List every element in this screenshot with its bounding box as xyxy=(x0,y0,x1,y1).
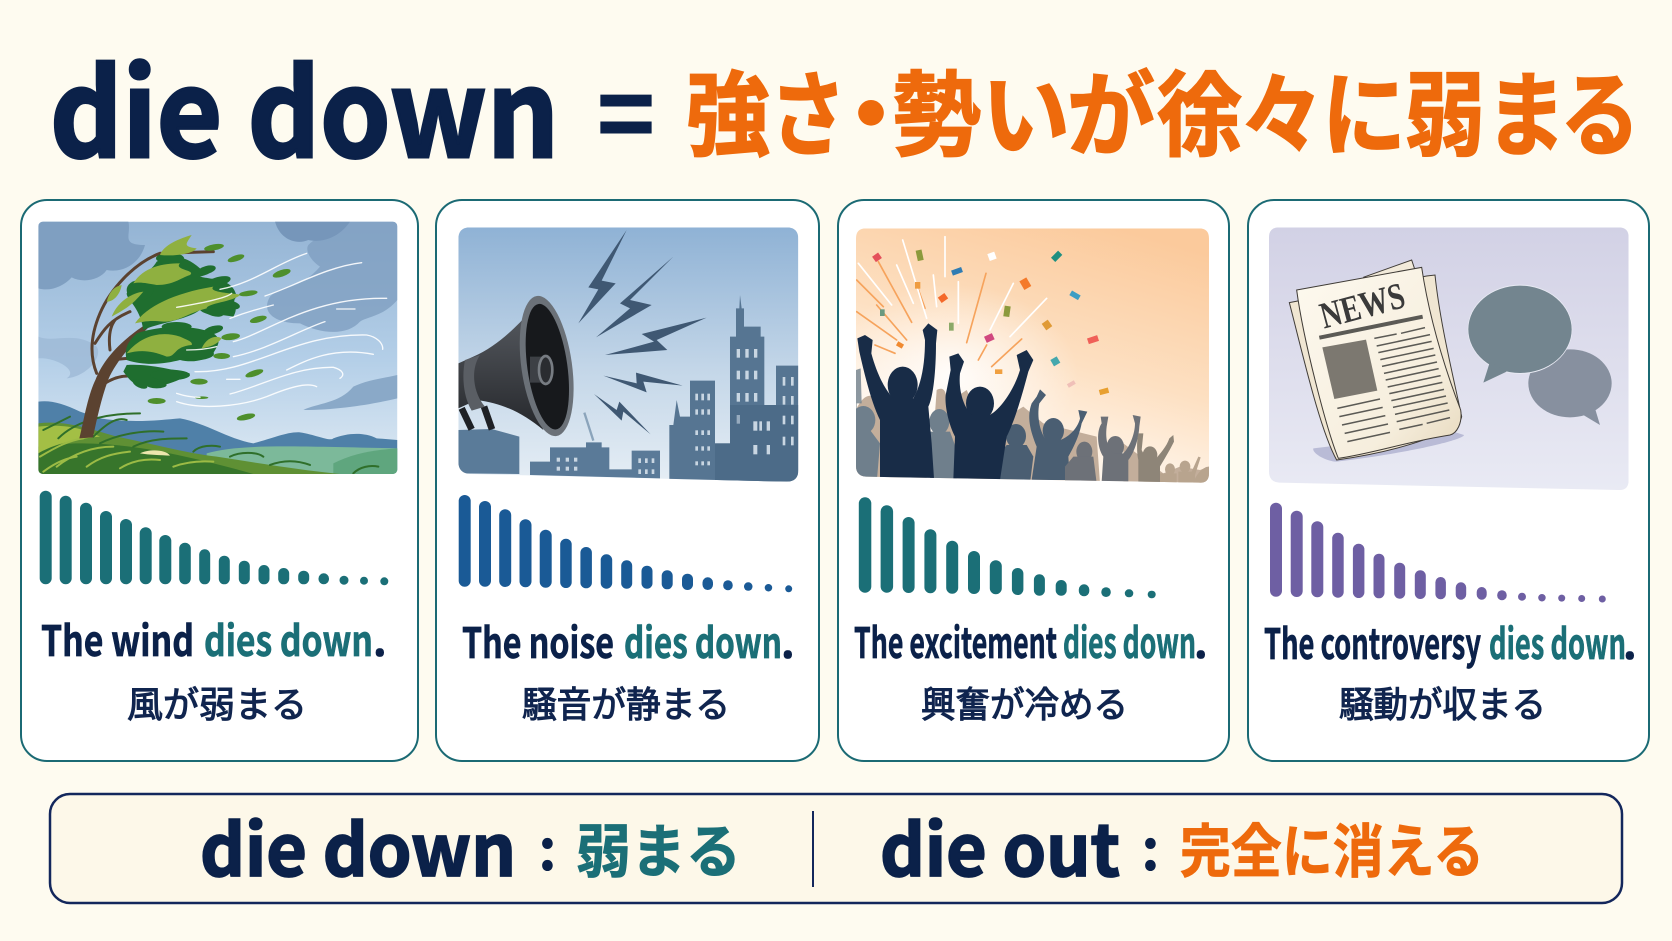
title: Japanese meaning: 徐 xyxy=(1157,42,1242,175)
translation: 風が弱まる xyxy=(127,684,307,725)
card frame xyxy=(838,200,1229,761)
title: Japanese meaning: 強 xyxy=(686,42,770,175)
sentence: . xyxy=(1623,611,1637,672)
title: Japanese meaning: 々 xyxy=(1240,42,1324,175)
die out label: die out xyxy=(880,795,1120,897)
sentence: The excitement xyxy=(854,610,1057,671)
sentence: . xyxy=(1194,610,1208,671)
sentence: dies down xyxy=(204,608,373,669)
decay bars xyxy=(40,491,388,585)
translation: 興奮が冷める xyxy=(921,684,1128,725)
colon: : xyxy=(538,803,557,887)
sentence: dies down xyxy=(1063,610,1196,671)
title: equals sign: = xyxy=(597,33,655,185)
translation: 騒動が収まる xyxy=(1339,684,1546,725)
title: Japanese meaning: 弱 xyxy=(1405,42,1485,175)
title: die down: die down xyxy=(50,18,559,192)
panel: wind xyxy=(21,200,418,761)
sentence: The wind xyxy=(41,608,194,669)
panel: noise xyxy=(436,200,819,761)
box frame xyxy=(50,794,1622,903)
colon: : xyxy=(1141,803,1160,887)
title: Japanese meaning: ま xyxy=(1486,42,1566,175)
illustration: cheering crowd xyxy=(851,228,1209,483)
decay bars xyxy=(1270,503,1606,602)
sentence: . xyxy=(781,610,795,671)
sentence xyxy=(41,608,387,669)
sentence: The controversy xyxy=(1264,611,1481,672)
card frame xyxy=(1248,200,1649,761)
card frame xyxy=(436,200,819,761)
sentence xyxy=(462,610,795,671)
card frame xyxy=(21,200,418,761)
comparison box xyxy=(50,794,1622,903)
panel: excitement xyxy=(838,200,1229,761)
die down meaning: 弱まる xyxy=(576,805,741,889)
title: Japanese meaning: さ xyxy=(770,42,846,175)
title: Japanese meaning: ・ xyxy=(821,35,921,180)
illustration: newspaper and speech bubbles xyxy=(1269,227,1629,491)
title: Japanese meaning xyxy=(686,35,1640,180)
sentence: The noise xyxy=(462,610,614,671)
translation: 騒音が静まる xyxy=(522,684,730,725)
sentence: . xyxy=(373,608,387,669)
illustration: tree in wind xyxy=(38,222,397,474)
title: Japanese meaning: に xyxy=(1322,42,1406,175)
decay bars xyxy=(859,497,1156,598)
panel: controversy xyxy=(1248,200,1649,761)
sentence: dies down xyxy=(624,610,782,671)
title xyxy=(50,18,1640,192)
die out meaning: 完全に消える xyxy=(1180,805,1484,889)
title: Japanese meaning: が xyxy=(1067,42,1155,175)
illustration: megaphone and city xyxy=(458,227,798,484)
title: Japanese meaning: る xyxy=(1560,42,1640,175)
title: Japanese meaning: い xyxy=(982,42,1070,175)
illustration: newspaper and speech bubbles: NEWS xyxy=(1316,275,1409,337)
die down label: die down xyxy=(200,795,516,897)
decay bars xyxy=(459,495,792,592)
title: Japanese meaning: 勢 xyxy=(892,42,981,175)
divider xyxy=(812,811,814,887)
